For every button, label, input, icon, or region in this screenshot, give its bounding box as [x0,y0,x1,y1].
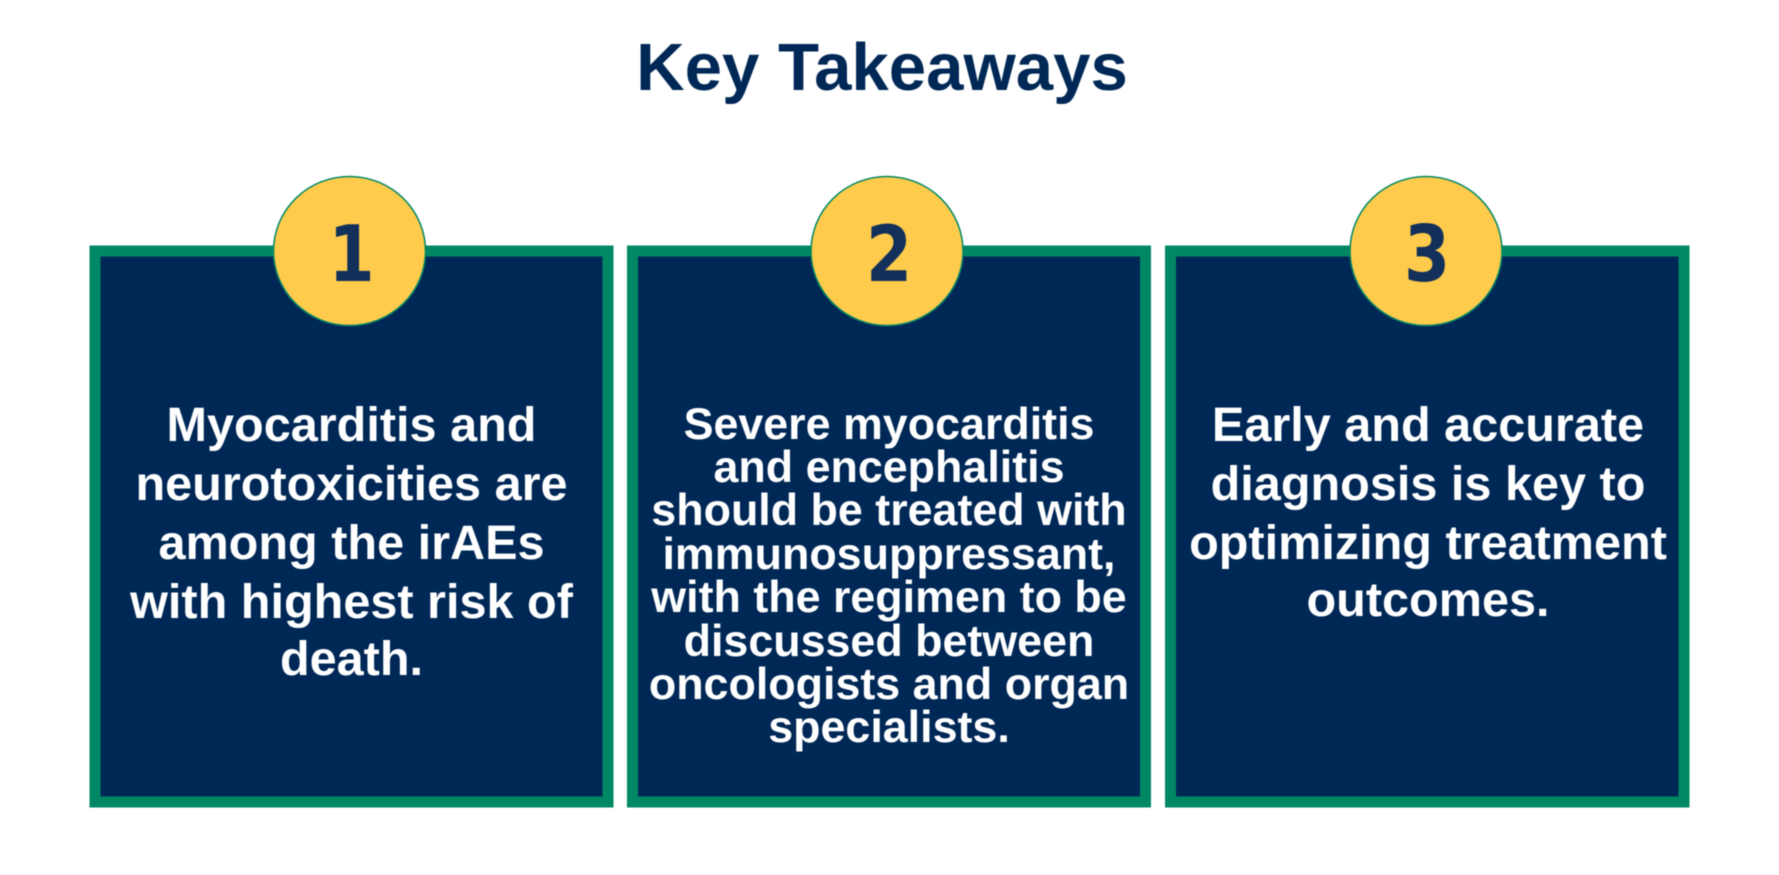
panel 2 text: specialists. [768,702,1010,752]
panel 3 text: diagnosis is key to [1211,457,1645,511]
number badge 2: 2 [866,210,912,300]
panel 3 box [1170,251,1684,802]
panel 1 text: death. [280,632,423,686]
panel 1 text: with highest risk of [129,575,574,629]
panel 3 text: Early and accurate [1212,398,1644,452]
number badge 1: 1 [328,210,375,300]
panel 2 text: oncologists and organ [649,659,1129,709]
panel: takeaway 2 [632,176,1146,802]
panel 2 text: should be treated with [651,485,1127,535]
panel 1 text: among the irAEs [158,516,545,570]
panel 2 text [649,399,1129,752]
panel 1 text [129,398,574,686]
panel 2 text: and encephalitis [713,442,1065,492]
panel 3 text [1189,398,1667,627]
panel 2 text: immunosuppressant, [662,529,1116,579]
panel 1 box [95,251,608,802]
panel 2 box [632,251,1146,802]
panel: takeaway 1 [95,176,608,802]
panel 1 text: neurotoxicities are [135,457,568,511]
panel 3 text: optimizing treatment [1189,516,1667,570]
number badge 2 [811,176,963,326]
panel 3 text: outcomes. [1306,573,1550,627]
panel 2 text: Severe myocarditis [684,399,1094,449]
panel: takeaway 3 [1170,176,1684,802]
number badge 3: 3 [1404,210,1450,300]
panel 2 text: discussed between [684,616,1094,666]
title: Key Takeaways [636,30,1128,105]
number badge 1 [274,176,426,326]
panel 1 text: Myocarditis and [167,398,536,452]
number badge 3 [1350,176,1502,326]
panel 2 text: with the regimen to be [650,572,1127,622]
